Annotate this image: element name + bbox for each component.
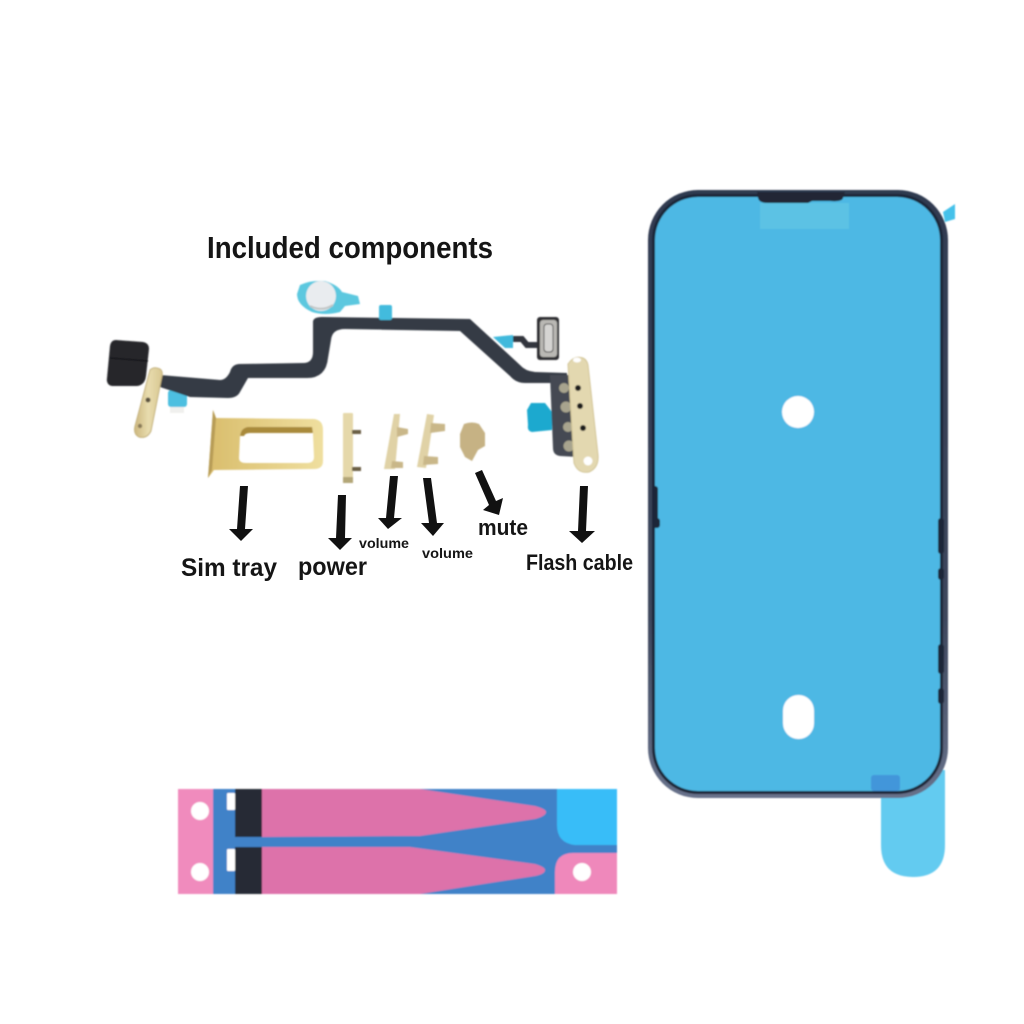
white tabs bbox=[227, 793, 235, 871]
blue liner bbox=[655, 197, 940, 791]
bottom pink lobe bbox=[262, 847, 545, 894]
label: sim tray: Sim tray bbox=[181, 554, 277, 582]
icon: large teal tab bbox=[527, 403, 552, 432]
icon: left cyan tab bbox=[168, 390, 187, 413]
icon: volume button two bbox=[417, 414, 445, 468]
label: flash cable: Flash cable bbox=[526, 550, 633, 575]
icon: volume button one bbox=[384, 414, 408, 469]
top right cyan tab bbox=[943, 204, 955, 222]
flex cable ribbon bbox=[160, 317, 567, 398]
icon: camera foam block bbox=[107, 340, 149, 386]
icon: earpiece mesh bbox=[537, 317, 559, 360]
arrow: flash cable bbox=[569, 486, 595, 543]
right edge notches bbox=[938, 518, 944, 704]
icon: power button bbox=[343, 413, 361, 483]
label: volume one: volume bbox=[359, 535, 409, 551]
pink corner bbox=[555, 853, 617, 894]
icon: left gold bracket bbox=[134, 368, 162, 437]
top pink lobe bbox=[262, 789, 546, 837]
corner blue patch bbox=[871, 775, 900, 791]
battery adhesive strip bbox=[178, 789, 617, 894]
icon: vibration disc with cyan backing bbox=[297, 281, 360, 314]
inner dark edge bbox=[652, 194, 943, 794]
title: Included components bbox=[207, 230, 493, 265]
strip base bbox=[178, 789, 617, 894]
bottom pull tab bbox=[881, 770, 945, 877]
left pink end bbox=[178, 789, 213, 894]
arrow: power bbox=[328, 495, 352, 550]
thin earpiece cable bbox=[513, 339, 538, 345]
label: mute: mute bbox=[478, 515, 528, 540]
bottom slot hole bbox=[783, 695, 814, 739]
label: power: power bbox=[298, 553, 367, 581]
icon: cyan tab by earpiece bbox=[493, 335, 513, 348]
icon: mute switch bbox=[460, 422, 485, 461]
cyan corner bbox=[557, 789, 617, 845]
icon: flash gold bar bbox=[568, 357, 598, 472]
outer frame bbox=[648, 190, 948, 798]
loose gold parts bbox=[208, 410, 485, 483]
left edge notches bbox=[652, 486, 660, 528]
label: volume two: volume bbox=[422, 545, 473, 561]
notch bbox=[757, 192, 845, 203]
screen waterproof seal bbox=[648, 190, 955, 877]
black bands bbox=[235, 789, 262, 894]
arrow: mute bbox=[475, 470, 503, 515]
arrow: volume one bbox=[378, 476, 402, 529]
top hole bbox=[782, 396, 814, 428]
arrow: sim tray bbox=[229, 486, 253, 541]
flex cable assembly bbox=[107, 281, 598, 472]
punch holes bbox=[191, 802, 591, 881]
notch liner patch bbox=[760, 203, 849, 229]
icon: sim tray bbox=[208, 410, 323, 478]
icon: small cyan marker bbox=[379, 305, 392, 320]
arrow: volume two bbox=[421, 478, 444, 536]
flash contact pad bbox=[550, 375, 578, 457]
